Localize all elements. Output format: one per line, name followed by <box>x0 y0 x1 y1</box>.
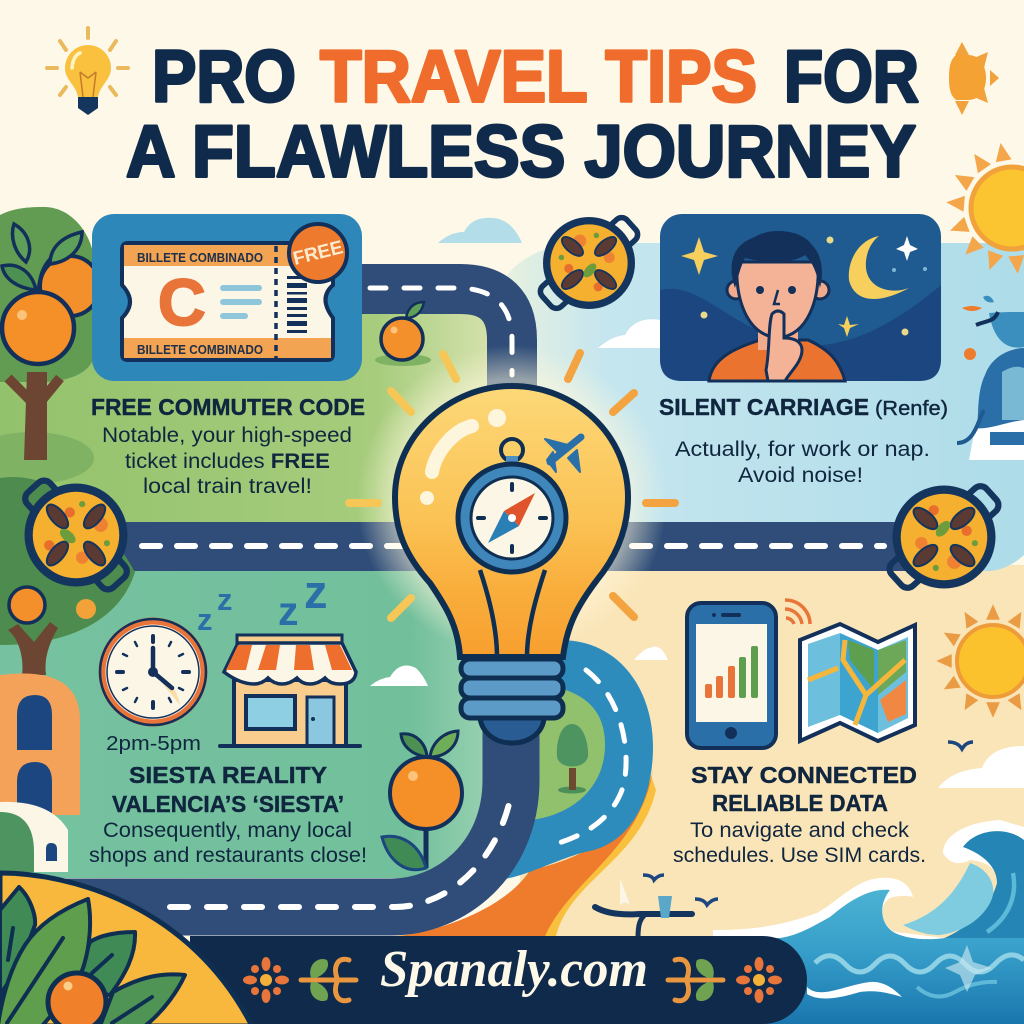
ticket top band <box>124 245 331 266</box>
wave stripe <box>987 873 1014 932</box>
body: free commuter code: Notable, your high-speed <box>102 424 352 447</box>
icon: paella left <box>22 477 130 593</box>
ticket barcode <box>287 276 307 333</box>
FREE badge: FREE <box>291 237 345 270</box>
stars and moon <box>681 236 927 337</box>
body: stay connected: schedules. Use SIM cards. <box>673 844 926 867</box>
hill: orange and yellow swoosh <box>395 770 656 936</box>
bulb screw base <box>461 659 563 743</box>
cloud teal zone <box>370 665 428 686</box>
cloud by night panel <box>598 319 660 348</box>
icon: sleeping zzz: z <box>304 565 328 618</box>
wifi arcs <box>785 600 810 624</box>
background: light blue sky zone <box>500 243 1024 528</box>
icon: small orange on road <box>375 302 431 366</box>
panel: ticket icon <box>92 214 362 381</box>
ticket perforation <box>274 246 278 358</box>
background: teal lower-left zone <box>0 565 484 878</box>
heading: stay connected: STAY CONNECTED <box>691 762 917 788</box>
hill with leaves and orange <box>0 873 252 1024</box>
sea with wave <box>700 820 1024 1024</box>
body: free commuter code: ticket includes FREE <box>125 450 330 473</box>
road: upper route <box>340 288 512 400</box>
wave light inner face <box>903 863 993 935</box>
icon: folded map <box>800 624 915 741</box>
body: silent carriage <box>675 438 930 487</box>
body: free commuter code: local train travel! <box>143 475 312 498</box>
heading: free commuter code: FREE COMMUTER CODE <box>91 394 365 420</box>
central light bulb <box>395 386 628 743</box>
body: siesta reality: Consequently, many local <box>103 819 352 842</box>
icon: sun lower right <box>936 604 1024 718</box>
road: central route <box>100 522 920 571</box>
tree: top left orange tree <box>0 207 100 484</box>
background: green meadow <box>0 313 500 528</box>
footer ornaments left <box>243 957 356 1003</box>
body: siesta reality <box>89 819 367 867</box>
icon: sleeping zzz <box>197 565 328 637</box>
icon: sleeping zzz: z <box>217 582 232 617</box>
icon: birds <box>643 742 973 905</box>
signal bars <box>705 646 758 698</box>
bulb filaments <box>480 570 545 657</box>
FREE badge <box>289 224 347 282</box>
title: TRAVEL TIPS <box>320 36 757 118</box>
footer ornaments right <box>668 957 782 1003</box>
ticket text lines <box>220 285 262 319</box>
body: free commuter code <box>102 424 352 498</box>
website name: Spanaly.com <box>380 941 648 998</box>
heading: siesta reality: SIESTA REALITY <box>129 762 327 788</box>
body: silent carriage: Actually, for work or nap. <box>675 438 930 461</box>
tree: lower left orange tree <box>0 477 135 675</box>
icon: signpost on the beach <box>595 878 692 937</box>
wave dark crest <box>940 831 1024 940</box>
title: PRO <box>152 36 296 118</box>
sea body <box>700 890 1024 1024</box>
ticket label top: BILLETE COMBINADO <box>137 251 263 265</box>
heading: silent carriage: (Renfe) <box>875 398 948 420</box>
icon: airplane <box>545 437 581 472</box>
body: stay connected: To navigate and check <box>690 819 910 842</box>
glow behind bulb <box>357 345 667 655</box>
title: FOR <box>784 36 919 118</box>
footer banner <box>190 936 807 1024</box>
ticket label bottom: BILLETE COMBINADO <box>137 343 263 357</box>
icon: rays around bulb <box>349 353 675 618</box>
body: silent carriage: Avoid noise! <box>738 464 863 487</box>
cloud right <box>938 746 1024 788</box>
title: A FLAWLESS JOURNEY <box>126 112 916 192</box>
title <box>126 36 919 192</box>
icon: paella right <box>886 483 1002 591</box>
river road loop <box>500 640 653 880</box>
ticket bottom band <box>124 338 331 358</box>
icon: phone with signal <box>687 600 810 748</box>
icon: sun top right <box>946 142 1024 274</box>
wave white foam <box>713 820 1024 960</box>
heading: siesta reality: VALENCIA’S ‘SIESTA’ <box>112 791 344 817</box>
label: 2pm-5pm: 2pm-5pm <box>106 733 201 755</box>
icon: coastal fountain <box>957 296 1024 460</box>
road: lower route <box>60 700 511 907</box>
cloud top <box>438 218 522 243</box>
icon: sleeping zzz: z <box>278 588 298 634</box>
body: stay connected <box>673 819 926 867</box>
ticket letter C: C <box>158 265 206 339</box>
icon: sleeping zzz: z <box>197 602 212 637</box>
icon: shop <box>220 635 360 746</box>
heading: silent carriage: SILENT CARRIAGE <box>659 394 869 420</box>
panel: silent carriage illustration <box>660 214 941 381</box>
body: siesta reality: shops and restaurants close! <box>89 844 367 867</box>
ticket <box>122 243 333 360</box>
background: sand lower-right zone <box>520 565 1024 945</box>
icon: paella top <box>537 215 641 311</box>
heading: stay connected: RELIABLE DATA <box>712 790 888 816</box>
icon: clock <box>100 619 206 725</box>
person shushing <box>709 231 845 381</box>
icon: title sun <box>949 42 999 115</box>
cloud sand zone <box>634 646 668 660</box>
heading: siesta reality <box>112 762 344 817</box>
building: orange arches <box>0 673 80 815</box>
heading: stay connected <box>691 762 917 816</box>
building: white house with green dome <box>0 802 68 872</box>
bulb highlights <box>420 409 506 505</box>
background: blue corner right of road <box>900 525 1024 571</box>
icon: title lightbulb <box>47 28 128 115</box>
icon: small tree <box>557 724 588 794</box>
compass <box>458 439 566 572</box>
icon: orange plant <box>382 731 462 870</box>
